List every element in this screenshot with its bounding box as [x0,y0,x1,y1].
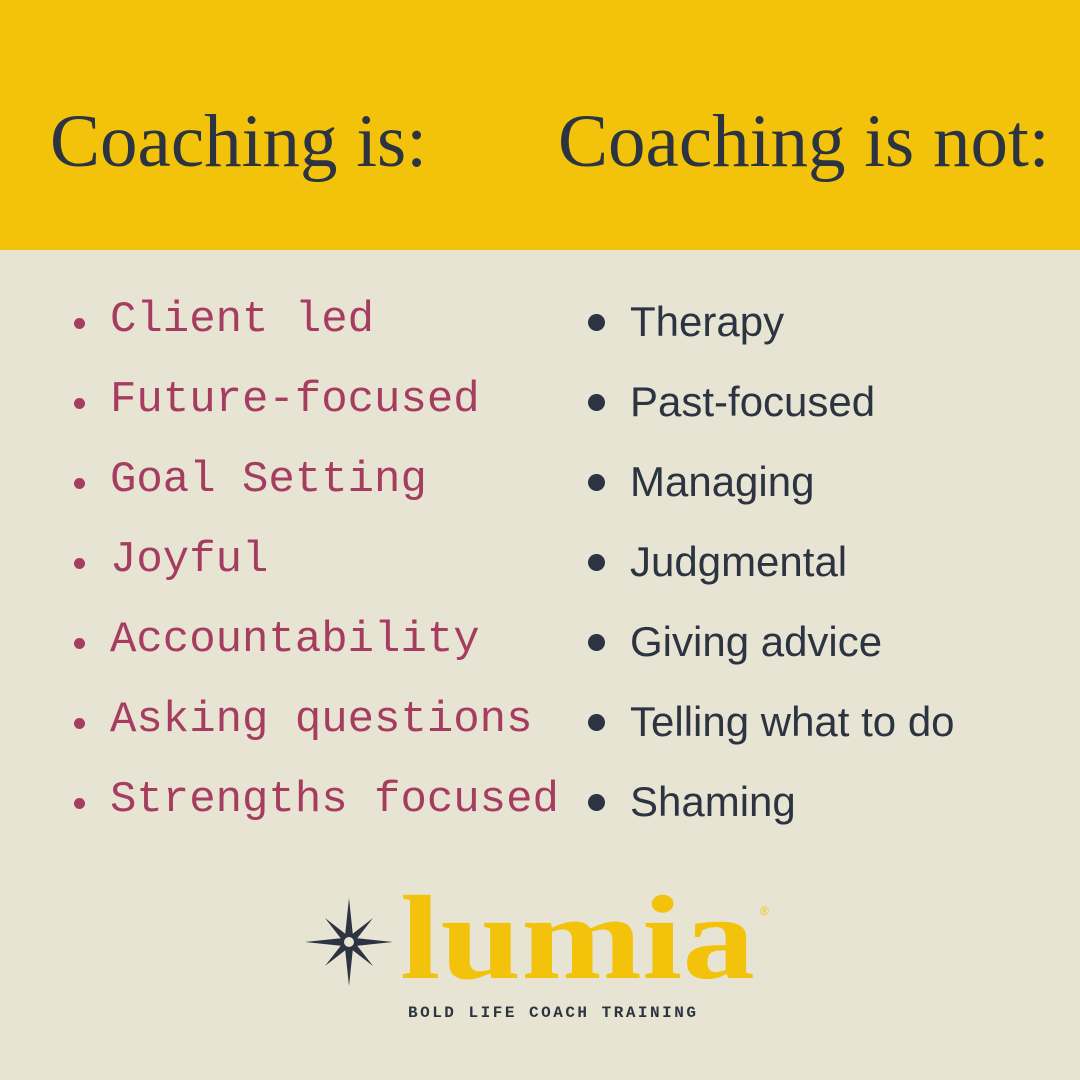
list: coaching is not: Past-focused [630,378,875,425]
list: coaching is not: Therapy [630,298,784,345]
list: coaching is not: Telling what to do [630,698,955,745]
list: coaching is [74,295,559,825]
logo [305,871,769,1022]
list: coaching is not: Giving advice [630,618,882,665]
list: coaching is: Strengths focused [110,775,559,825]
list: coaching is: Future-focused [110,375,480,425]
logo: ® [760,904,769,918]
list: coaching is not: Shaming [630,778,796,825]
list: coaching is not: Judgmental [630,538,847,585]
wordmark: lumia [400,871,755,1004]
list: coaching is: Goal Setting [110,455,427,505]
header band [0,0,1080,250]
list: coaching is: Joyful [110,535,268,585]
list: coaching is not [588,298,955,825]
list: coaching is: Client led [110,295,374,345]
heading: coaching is not: Coaching is not: [558,100,1050,183]
list: coaching is: Asking questions [110,695,532,745]
icon: star [305,898,393,986]
tagline: BOLD LIFE COACH TRAINING [408,1004,698,1022]
list: coaching is not: Managing [630,458,814,505]
heading: coaching is: Coaching is: [50,100,427,183]
list: coaching is: Accountability [110,615,480,665]
